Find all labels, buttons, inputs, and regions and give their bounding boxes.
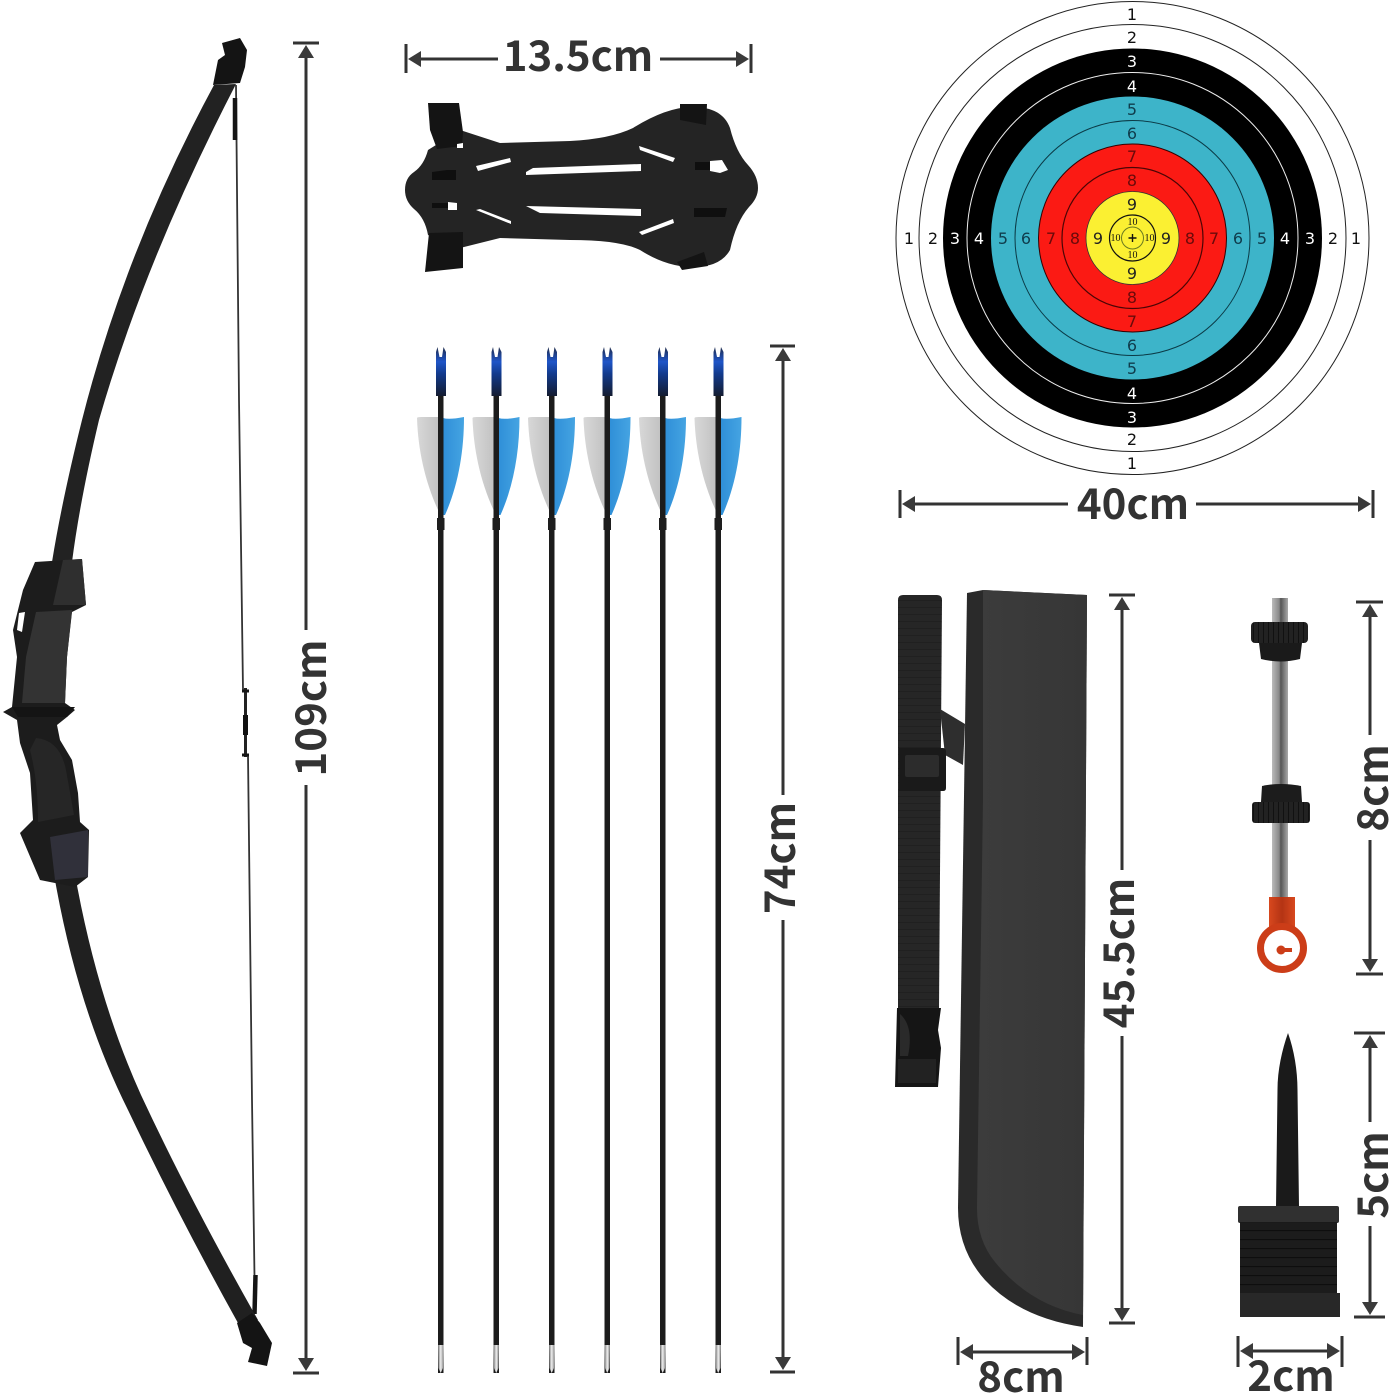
arrow 6 (694, 347, 742, 1373)
bow string (235, 85, 256, 1314)
quiver panel (977, 590, 1087, 1315)
target numbers: 3 (950, 229, 960, 248)
target numbers: 5 (998, 229, 1008, 248)
target numbers (904, 5, 1361, 473)
arrow 5 (639, 347, 686, 1373)
target numbers: 1 (1127, 5, 1137, 24)
guard body (405, 107, 758, 267)
target numbers: 9 (1093, 229, 1103, 248)
quiver body (958, 590, 1087, 1327)
guard slots (448, 143, 728, 235)
target numbers: 4 (1280, 229, 1290, 248)
bow sight pin (1251, 598, 1310, 970)
bow (3, 38, 272, 1366)
dimension: arrows 74cm: 74cm (747, 802, 808, 914)
target numbers: 1 (1127, 454, 1137, 473)
arrow 4 (584, 347, 630, 1373)
upper knob (1251, 622, 1308, 662)
target numbers: 3 (1305, 229, 1315, 248)
rest spike (1276, 1033, 1299, 1207)
guard buckles (432, 162, 727, 217)
lower limb tip (237, 1313, 272, 1366)
target numbers: 7 (1127, 147, 1137, 166)
dimension: quiver length 45.5cm: 45.5cm (1086, 878, 1147, 1028)
target numbers: 2 (1127, 430, 1137, 449)
target numbers: 4 (1127, 77, 1137, 96)
target numbers: 2 (1328, 229, 1338, 248)
target face (896, 2, 1369, 474)
target numbers: 2 (928, 229, 938, 248)
target numbers: 1 (1351, 229, 1361, 248)
dimension: arm guard 13.5cm (406, 23, 751, 84)
threaded rod (1272, 598, 1288, 898)
dimension: rest height 5cm (1340, 1033, 1391, 1317)
target numbers: 5 (1127, 100, 1137, 119)
target numbers: 6 (1233, 229, 1243, 248)
target numbers: 1 (904, 229, 914, 248)
target rings (896, 2, 1369, 474)
orange eyelet (1260, 897, 1304, 970)
arrow rest (1238, 1033, 1340, 1317)
target numbers: 6 (1127, 336, 1137, 355)
dimension: bow 109cm: 109cm (278, 640, 339, 776)
target numbers: 10 (1128, 217, 1138, 228)
target numbers: 8 (1185, 229, 1195, 248)
target numbers: 2 (1127, 28, 1137, 47)
arrow 1 (417, 347, 464, 1373)
target numbers: 9 (1127, 264, 1137, 283)
riser grip (3, 559, 89, 887)
upper limb (52, 84, 236, 562)
target numbers: 8 (1127, 288, 1137, 307)
target numbers: 3 (1127, 408, 1137, 427)
lower limb (55, 880, 258, 1323)
dimension: target 40cm: 40cm (1077, 471, 1189, 532)
dimension: quiver width 8cm (958, 1337, 1087, 1396)
target numbers: 10 (1110, 233, 1120, 244)
target numbers: 6 (1021, 229, 1031, 248)
rest base (1238, 1206, 1340, 1317)
target numbers: 10 (1144, 233, 1154, 244)
arrow 2 (472, 347, 520, 1373)
target numbers: 4 (1127, 384, 1137, 403)
target numbers: 5 (1127, 359, 1137, 378)
dimension: arrows 74cm (747, 346, 808, 1372)
lower knob (1252, 784, 1310, 823)
arrow 3 (528, 347, 575, 1373)
dimension: sight 8cm (1340, 602, 1391, 974)
arrows (417, 347, 742, 1373)
target numbers: 9 (1127, 195, 1137, 214)
target numbers: 9 (1161, 229, 1171, 248)
target numbers: 6 (1127, 124, 1137, 143)
target numbers: 3 (1127, 52, 1137, 71)
target numbers: 8 (1070, 229, 1080, 248)
dimension: bow 109cm (278, 43, 339, 1373)
dimension: quiver length 45.5cm (1086, 595, 1147, 1323)
target numbers: 7 (1209, 229, 1219, 248)
dimension: arm guard 13.5cm: 13.5cm (503, 23, 653, 84)
dimension: target 40cm (900, 471, 1373, 532)
quiver (895, 590, 1087, 1327)
target numbers: 10 (1128, 250, 1138, 261)
target numbers: 7 (1127, 312, 1137, 331)
target numbers: 8 (1127, 171, 1137, 190)
quiver strap (895, 595, 965, 1087)
target numbers: 5 (1257, 229, 1267, 248)
arm guard (405, 103, 758, 272)
target numbers: 4 (974, 229, 984, 248)
upper limb tip (213, 38, 247, 85)
target numbers: 7 (1046, 229, 1056, 248)
guard straps (425, 103, 708, 272)
